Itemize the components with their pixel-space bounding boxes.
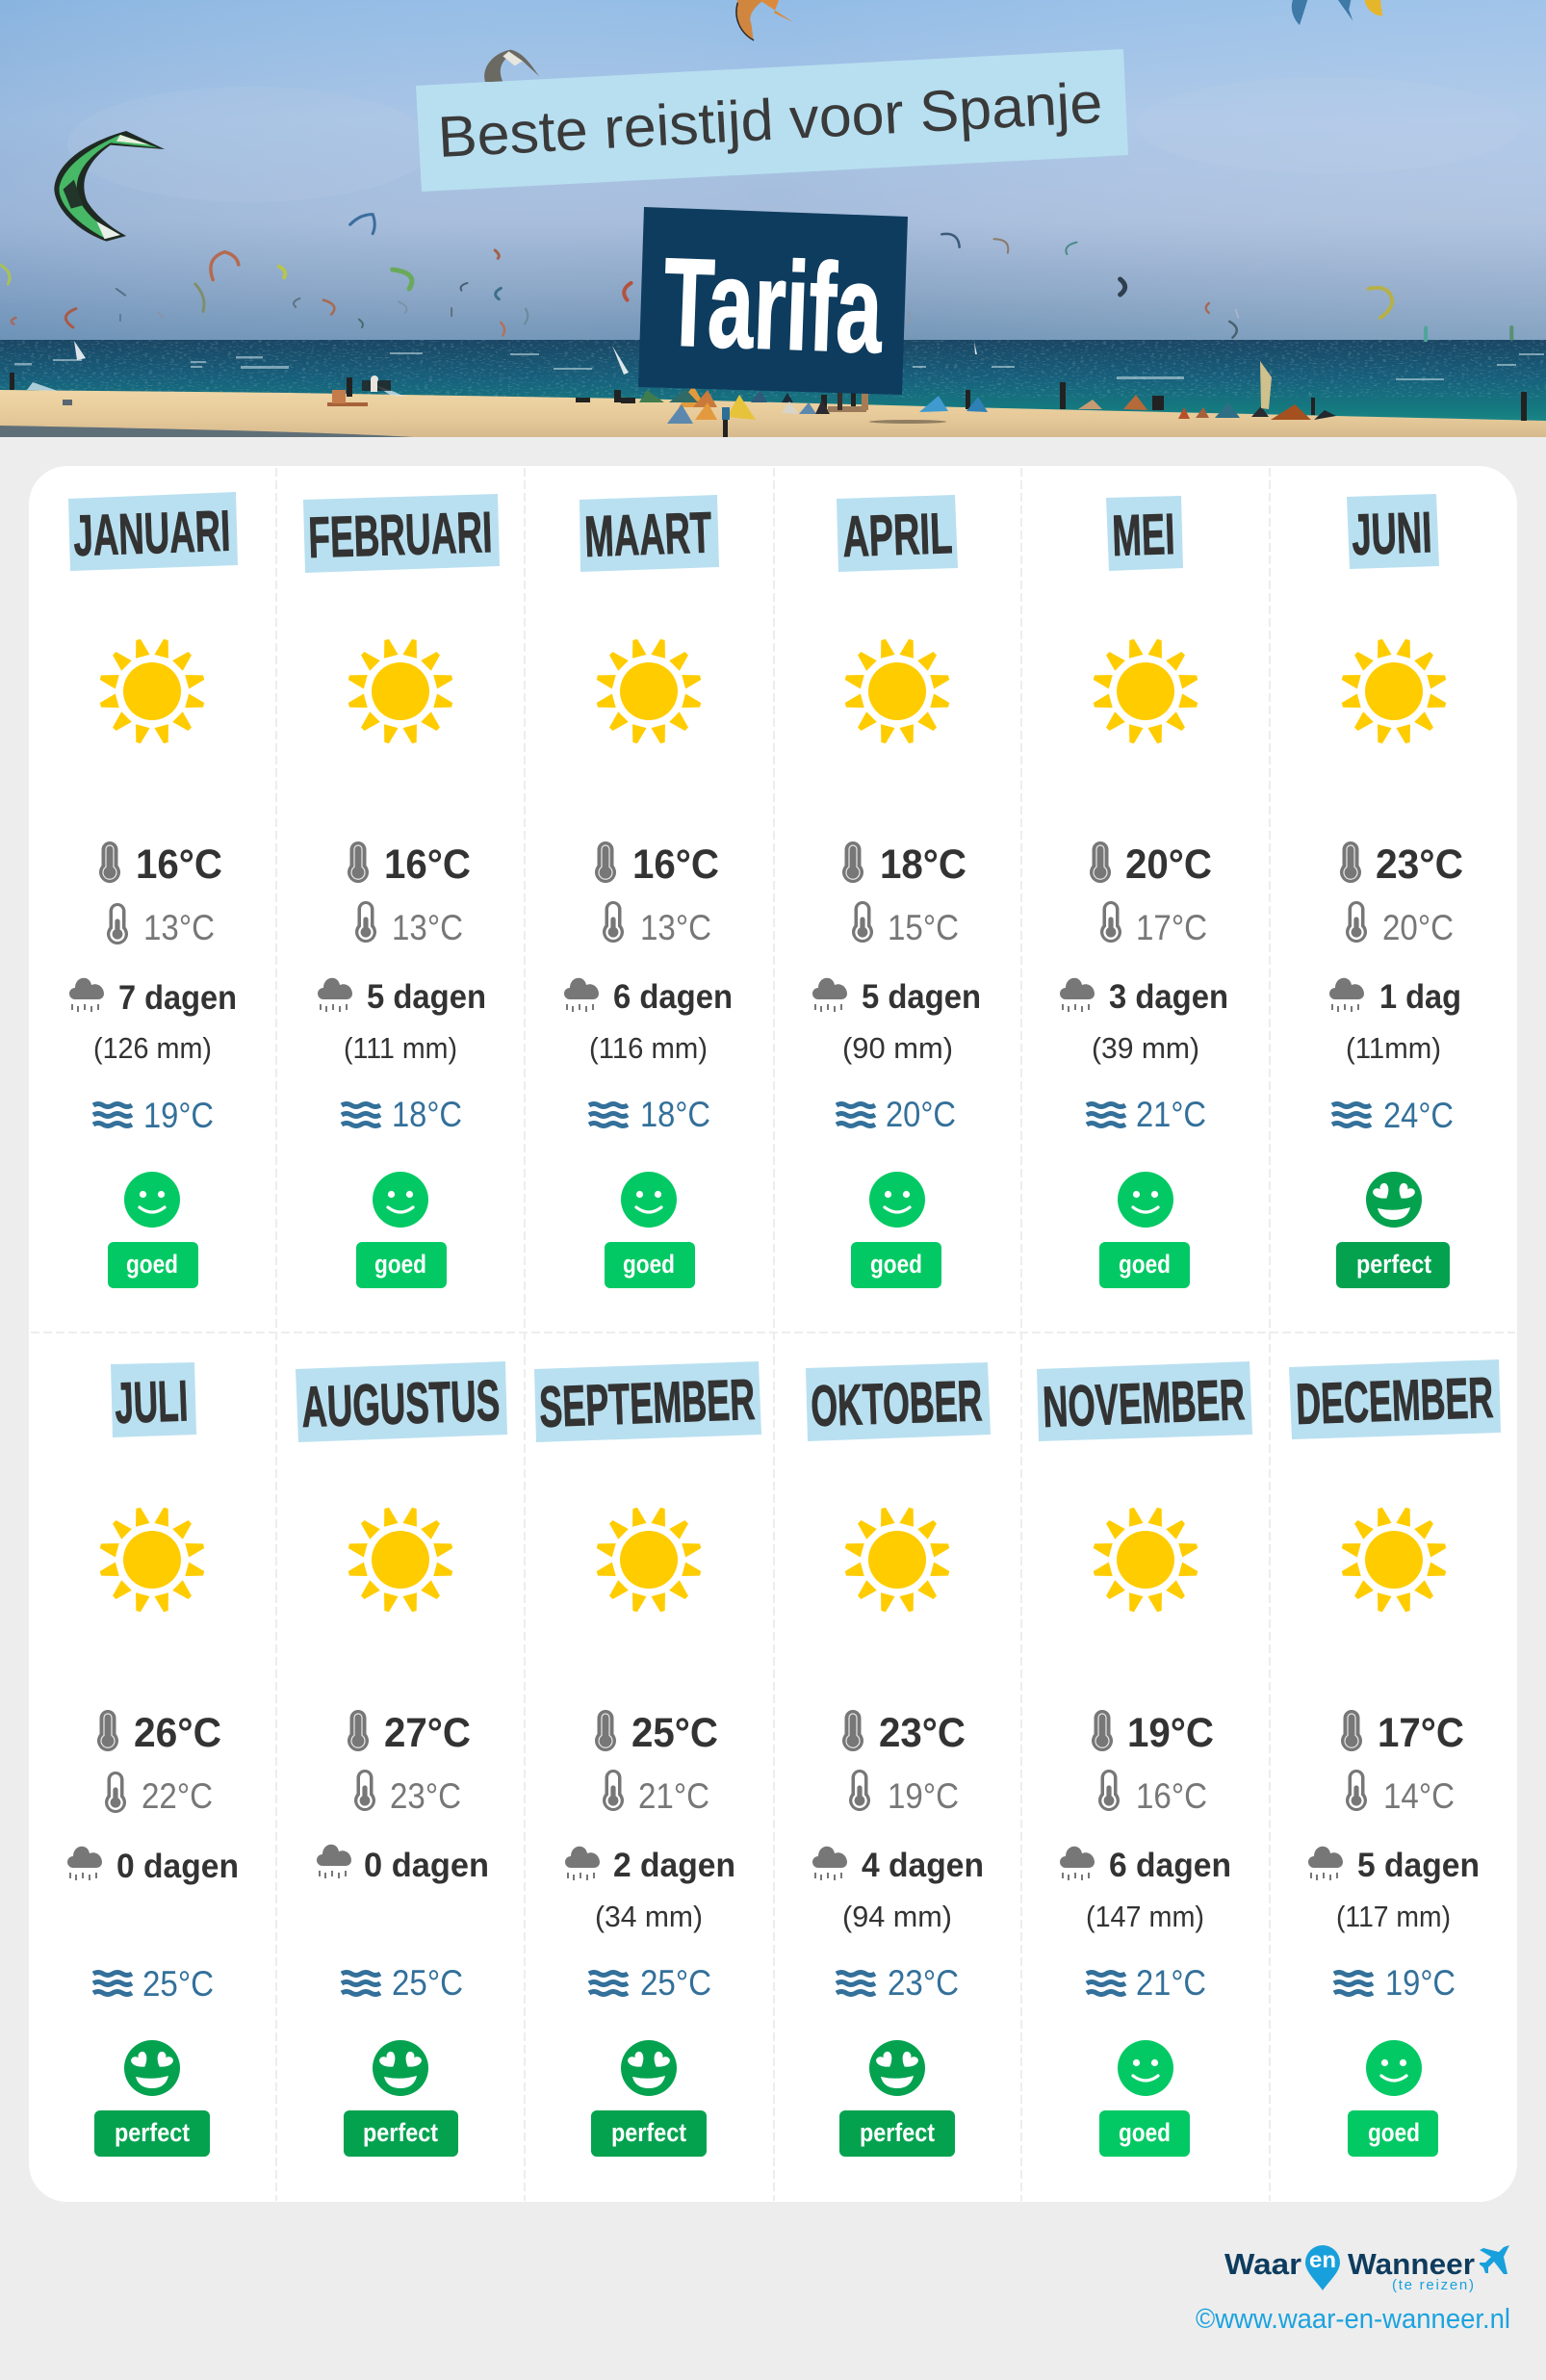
sea temperature: 25°C (640, 1963, 711, 2003)
panel: oktober (806, 1362, 991, 2157)
rating badge: perfect (611, 2118, 686, 2147)
title banner: Beste reistijd voor Spanje (436, 70, 1104, 169)
icon: rain cloud (1060, 978, 1095, 1012)
rating badge: goed (870, 1250, 922, 1279)
icon: sea waves (1087, 1972, 1125, 1995)
sea temperature: 20°C (886, 1095, 956, 1134)
month label: APRIL (841, 501, 953, 569)
rating badge (839, 2110, 955, 2157)
max temperature: 23°C (1376, 841, 1463, 888)
icon: smiley good (869, 1172, 925, 1228)
rainfall: (111 mm) (344, 1031, 457, 1065)
icon: sea waves (1087, 1103, 1125, 1126)
rating badge (1099, 1242, 1190, 1288)
rating badge: goed (1368, 2118, 1420, 2147)
rain days: 1 dag (1379, 978, 1461, 1016)
month label (1106, 496, 1183, 571)
icon: sea waves (1334, 1972, 1373, 1995)
icon: rain cloud (1329, 978, 1364, 1012)
month label: OKTOBER (810, 1368, 983, 1438)
icon: thermometer low (1346, 1770, 1367, 1811)
rating badge (1336, 1242, 1450, 1288)
icon: sun (347, 637, 454, 745)
sea temperature: 25°C (142, 1964, 214, 2004)
month label (111, 1362, 196, 1437)
sea temperature: 21°C (1136, 1095, 1206, 1134)
panel: mei (1060, 496, 1228, 1288)
rainfall: (39 mm) (1092, 1031, 1199, 1065)
sea temperature: 18°C (392, 1095, 462, 1134)
panel: months table (29, 466, 1517, 2202)
min temperature: 21°C (638, 1776, 709, 1816)
month label (296, 1361, 507, 1442)
max temperature: 20°C (1125, 841, 1212, 888)
rain days: 0 dagen (116, 1848, 239, 1885)
icon: rain cloud (318, 978, 352, 1012)
panel: april (812, 495, 981, 1288)
max temperature: 16°C (632, 841, 719, 888)
min temperature: 13°C (640, 908, 711, 947)
icon: smiley good (373, 1172, 428, 1228)
rating badge (591, 2110, 707, 2157)
icon: thermometer low (1100, 901, 1121, 943)
kites in the sky (0, 0, 1511, 340)
rating badge (605, 1242, 695, 1288)
max temperature: 18°C (880, 841, 966, 888)
icon: rain cloud (317, 1845, 351, 1878)
icon: sea waves (837, 1972, 875, 1995)
icon: smiley perfect (869, 2040, 925, 2096)
logo: Waar en Wanneer (1224, 2245, 1509, 2293)
sea temperature: 19°C (143, 1096, 214, 1135)
rain days: 4 dagen (862, 1847, 984, 1884)
panel: november (1037, 1361, 1252, 2157)
icon: sea waves (1332, 1103, 1371, 1126)
icon: sea waves (342, 1972, 380, 1995)
rain days: 5 dagen (862, 978, 981, 1016)
icon: thermometer low (105, 1772, 126, 1813)
icon: thermometer high (97, 1710, 118, 1751)
min temperature: 13°C (392, 908, 463, 947)
month label (534, 1361, 761, 1442)
panel: augustus (296, 1361, 507, 2157)
rating badge: goed (126, 1250, 178, 1279)
panel: juni (1329, 494, 1463, 1288)
icon: sea waves (93, 1972, 132, 1995)
rating badge (851, 1242, 941, 1288)
rain days: 0 dagen (364, 1847, 489, 1884)
month label: NOVEMBER (1042, 1367, 1246, 1439)
month label: SEPTEMBER (538, 1367, 756, 1439)
rain days: 6 dagen (1109, 1847, 1231, 1884)
min temperature: 17°C (1136, 908, 1207, 947)
website credit: ©www.waar-en-wanneer.nl (1196, 2304, 1510, 2335)
rainfall: (90 mm) (842, 1031, 953, 1065)
rain days: 3 dagen (1109, 978, 1228, 1016)
month label: JUNI (1351, 500, 1432, 567)
max temperature: 26°C (134, 1710, 221, 1756)
rainfall: (126 mm) (93, 1031, 212, 1065)
icon: thermometer high (1092, 1710, 1113, 1751)
icon: rain cloud (812, 1847, 847, 1880)
month label (1037, 1361, 1252, 1441)
icon: smiley perfect (1366, 1172, 1422, 1228)
icon: sun (1340, 1506, 1448, 1614)
icon: sea waves (589, 1972, 628, 1995)
logo: Waar en Wanneer: Waar (1224, 2247, 1301, 2281)
sea temperature: 19°C (1385, 1963, 1456, 2003)
max temperature: 19°C (1127, 1710, 1214, 1756)
icon: thermometer high (595, 841, 616, 883)
icon: map pin: en (1309, 2247, 1336, 2272)
max temperature: 25°C (631, 1710, 718, 1756)
sea temperature: 25°C (392, 1963, 463, 2003)
logo: Waar en Wanneer: Wanneer (1348, 2247, 1475, 2281)
rating badge (94, 2110, 210, 2157)
icon: thermometer low (354, 1770, 375, 1811)
rain days: 6 dagen (613, 978, 733, 1016)
beach figures and kites on the sand (10, 361, 1527, 437)
destination label: Tarifa (638, 207, 908, 395)
panel: februari (303, 494, 500, 1288)
rating badge (1099, 2110, 1190, 2157)
month label: FEBRUARI (307, 500, 493, 570)
icon: thermometer low (603, 901, 624, 943)
icon: smiley good (124, 1172, 180, 1228)
month label: JANUARI (72, 499, 231, 568)
min temperature: 19°C (888, 1776, 959, 1816)
icon: thermometer high (99, 841, 120, 883)
icon: map pin (1305, 2245, 1340, 2290)
icon: thermometer high (842, 841, 863, 883)
icon: airplane (1480, 2245, 1509, 2274)
rain days: 2 dagen (613, 1847, 735, 1884)
month label (1347, 494, 1439, 569)
rainfall: (11mm) (1346, 1031, 1441, 1065)
icon: smiley perfect (124, 2040, 180, 2096)
rating badge: perfect (115, 2118, 190, 2147)
icon: thermometer low (852, 901, 873, 943)
icon: thermometer high (1090, 841, 1111, 883)
icon: smiley good (1118, 1172, 1173, 1228)
sea temperature: 24°C (1383, 1096, 1454, 1135)
rain days: 5 dagen (367, 978, 486, 1016)
icon: thermometer low (849, 1770, 870, 1811)
rating badge (356, 1242, 447, 1288)
icon: thermometer low (107, 903, 128, 944)
rating badge: goed (1119, 1250, 1171, 1279)
icon: sun (98, 637, 206, 745)
rating badge: perfect (363, 2118, 438, 2147)
rainfall: (94 mm) (842, 1900, 952, 1933)
rating badge (108, 1242, 198, 1288)
month label (303, 494, 500, 573)
rainfall: (117 mm) (1336, 1900, 1451, 1933)
max temperature: 16°C (136, 841, 222, 888)
max temperature: 23°C (879, 1710, 966, 1756)
month label: MAART (583, 500, 712, 569)
min temperature: 23°C (390, 1776, 461, 1816)
icon: rain cloud (67, 1847, 102, 1880)
icon: rain cloud (1060, 1847, 1095, 1880)
icon: smiley good (1366, 2040, 1422, 2096)
icon: sun (1340, 637, 1448, 745)
icon: rain cloud (1308, 1847, 1343, 1880)
rating badge (1348, 2110, 1438, 2157)
icon: sun (595, 1506, 703, 1614)
icon: thermometer low (355, 901, 376, 943)
rainfall: (147 mm) (1086, 1900, 1204, 1933)
icon: thermometer high (842, 1710, 863, 1751)
min temperature: 15°C (888, 908, 959, 947)
title banner (416, 49, 1128, 192)
icon: sea waves (589, 1103, 628, 1126)
icon: thermometer high (348, 841, 369, 883)
month label (806, 1362, 991, 1441)
icon: smiley good (621, 1172, 677, 1228)
min temperature: 16°C (1136, 1776, 1207, 1816)
month label: AUGUSTUS (300, 1368, 501, 1439)
destination label: Tarifa: Tarifa (661, 231, 886, 379)
rating badge: perfect (1356, 1250, 1431, 1279)
max temperature: 27°C (384, 1710, 471, 1756)
min temperature: 14°C (1383, 1776, 1455, 1816)
logo: Waar en Wanneer: (te reizen) (1392, 2277, 1474, 2293)
icon: smiley perfect (621, 2040, 677, 2096)
icon: rain cloud (564, 978, 599, 1012)
month label: JULI (114, 1368, 189, 1436)
rating badge (344, 2110, 458, 2157)
month label (837, 495, 958, 572)
panel: september (534, 1361, 761, 2157)
max temperature: 17°C (1378, 1710, 1464, 1756)
icon: thermometer high (348, 1710, 369, 1751)
rainfall: (34 mm) (595, 1900, 703, 1933)
header photo: kitesurfers on Tarifa beach (0, 0, 1546, 437)
sea temperature: 21°C (1136, 1963, 1206, 2003)
icon: rain cloud (69, 978, 104, 1012)
panel: juli (67, 1362, 239, 2157)
icon: sun (1092, 1506, 1199, 1614)
sea temperature: 23°C (888, 1963, 959, 2003)
rainfall: (116 mm) (589, 1031, 708, 1065)
icon: rain cloud (812, 978, 847, 1012)
rating badge: goed (1119, 2118, 1171, 2147)
icon: sun (843, 637, 951, 745)
rain days: 7 dagen (118, 979, 237, 1017)
icon: thermometer low (1346, 901, 1367, 943)
panel: maart (564, 495, 733, 1288)
month label (580, 495, 719, 572)
icon: sun (98, 1506, 206, 1614)
rating badge: perfect (860, 2118, 935, 2147)
sea temperature: 18°C (640, 1095, 710, 1134)
max temperature: 16°C (384, 841, 471, 888)
rating badge: goed (623, 1250, 675, 1279)
month label (68, 492, 238, 571)
icon: thermometer high (1341, 1710, 1362, 1751)
icon: sun (843, 1506, 951, 1614)
icon: thermometer low (1098, 1770, 1120, 1811)
icon: sun (347, 1506, 454, 1614)
icon: thermometer low (603, 1770, 624, 1811)
icon: smiley good (1118, 2040, 1173, 2096)
icon: sun (595, 637, 703, 745)
rating badge: goed (374, 1250, 426, 1279)
min temperature: 13°C (143, 908, 215, 947)
icon: sun (1092, 637, 1199, 745)
min temperature: 20°C (1382, 908, 1454, 947)
min temperature: 22°C (142, 1776, 213, 1816)
icon: sea waves (93, 1103, 132, 1126)
icon: thermometer high (1340, 841, 1361, 883)
icon: rain cloud (565, 1847, 600, 1880)
rain days: 5 dagen (1357, 1847, 1480, 1884)
month label: MEI (1111, 502, 1175, 568)
icon: sea waves (837, 1103, 875, 1126)
panel: december (1289, 1359, 1501, 2157)
icon: thermometer high (595, 1710, 616, 1751)
icon: sea waves (342, 1103, 380, 1126)
icon: smiley perfect (373, 2040, 428, 2096)
panel: januari (68, 492, 238, 1288)
